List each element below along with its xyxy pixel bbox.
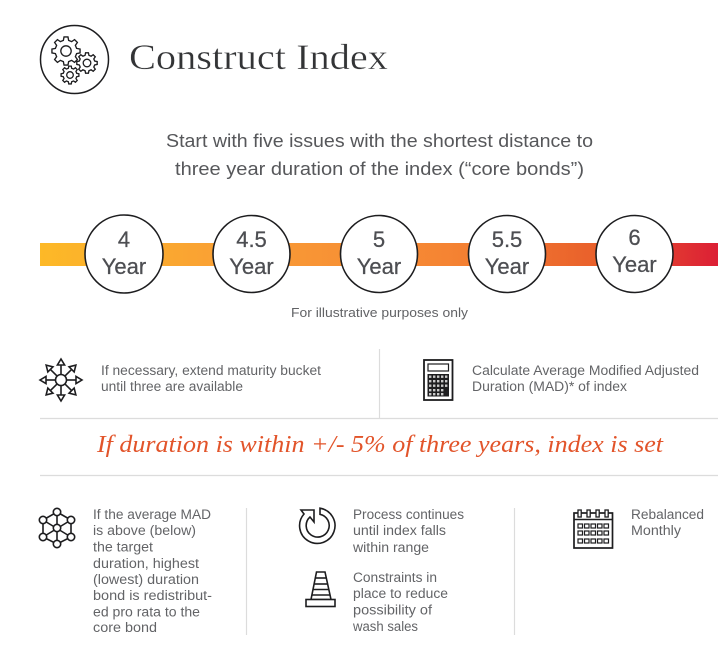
- text: process continues: until index falls: [353, 523, 446, 538]
- node: 5.5 year: Year: [485, 254, 529, 279]
- node: 4 year: Year: [102, 254, 146, 279]
- gradient bar: [40, 243, 718, 266]
- text: process continues: Process continues: [353, 507, 464, 522]
- icon: circular arrow: [300, 508, 335, 543]
- node: 5 year: [340, 216, 418, 292]
- callout: duration rule: If duration is within +/- 5% of three years, index is set: [96, 432, 664, 458]
- text: redistribution: core bond: [93, 620, 157, 635]
- panel: extend maturity: [40, 359, 321, 401]
- header: construct index: [40, 26, 388, 94]
- icon: gears in circle: [40, 26, 108, 94]
- text: constraints: [352, 570, 448, 634]
- node: 6 year: [596, 216, 673, 292]
- intro text: three year duration of the index (“core bonds”): [175, 158, 584, 179]
- text: constraints: place to reduce: [353, 586, 448, 601]
- node: 5.5 year: 5.5: [492, 227, 522, 252]
- text: redistribution: duration, highest: [93, 556, 199, 571]
- text: redistribution: [93, 507, 212, 635]
- node: 4 year: 4: [118, 227, 130, 252]
- text: extend maturity: If necessary, extend maturity bucket: [101, 363, 321, 378]
- intro text: Start with five issues with the shortest distance to: [166, 130, 593, 151]
- text: calculate MAD: Calculate Average Modified Adjusted: [472, 363, 699, 378]
- text: process continues: within range: [352, 540, 429, 555]
- panel: redistribution: [39, 507, 212, 635]
- panel: constraints: [306, 570, 448, 634]
- text: constraints: possibility of: [353, 602, 432, 618]
- text: process continues: [352, 507, 464, 555]
- panel: rebalanced monthly: [574, 507, 704, 548]
- text: redistribution: ed pro rata to the: [93, 604, 200, 620]
- panel: process continues: [300, 507, 464, 555]
- text: constraints: wash sales: [352, 619, 418, 634]
- node: 5.5 year: [468, 216, 546, 292]
- text: rebalanced monthly: Monthly: [631, 523, 681, 538]
- text: extend maturity: [101, 363, 321, 394]
- text: extend maturity: until three are available: [101, 379, 243, 394]
- icon: outward arrows: [40, 359, 82, 401]
- node: 4 year: [85, 215, 163, 293]
- note: illustrative: For illustrative purposes only: [291, 305, 469, 320]
- node: 4.5 year: 4.5: [236, 227, 267, 252]
- text: constraints: Constraints in: [353, 570, 437, 585]
- text: redistribution: If the average MAD: [93, 507, 211, 522]
- node: 6 year: Year: [612, 252, 657, 277]
- icon: calculator: [424, 360, 452, 400]
- title: Construct Index: [129, 37, 388, 77]
- maturity timeline: [40, 215, 718, 293]
- panel: calculate MAD: [424, 360, 699, 400]
- text: redistribution: (lowest) duration: [93, 572, 199, 587]
- node: 4.5 year: Year: [229, 254, 274, 279]
- text: rebalanced monthly: Rebalanced: [631, 507, 704, 522]
- icon: calendar: [574, 510, 612, 548]
- text: redistribution: is above (below): [93, 523, 196, 538]
- node: 4.5 year: [213, 216, 290, 292]
- node: 6 year: 6: [628, 225, 641, 250]
- text: calculate MAD: Duration (MAD)* of index: [472, 379, 627, 394]
- node: 5 year: 5: [373, 227, 385, 252]
- text: redistribution: bond is redistribut-: [93, 588, 212, 603]
- text: rebalanced monthly: [631, 507, 704, 538]
- text: calculate MAD: [472, 363, 699, 394]
- icon: hexagonal network: [39, 508, 75, 548]
- node: 5 year: Year: [357, 254, 401, 279]
- text: redistribution: the target: [93, 540, 153, 554]
- icon: traffic cone: [306, 572, 335, 606]
- intro text: [166, 130, 593, 179]
